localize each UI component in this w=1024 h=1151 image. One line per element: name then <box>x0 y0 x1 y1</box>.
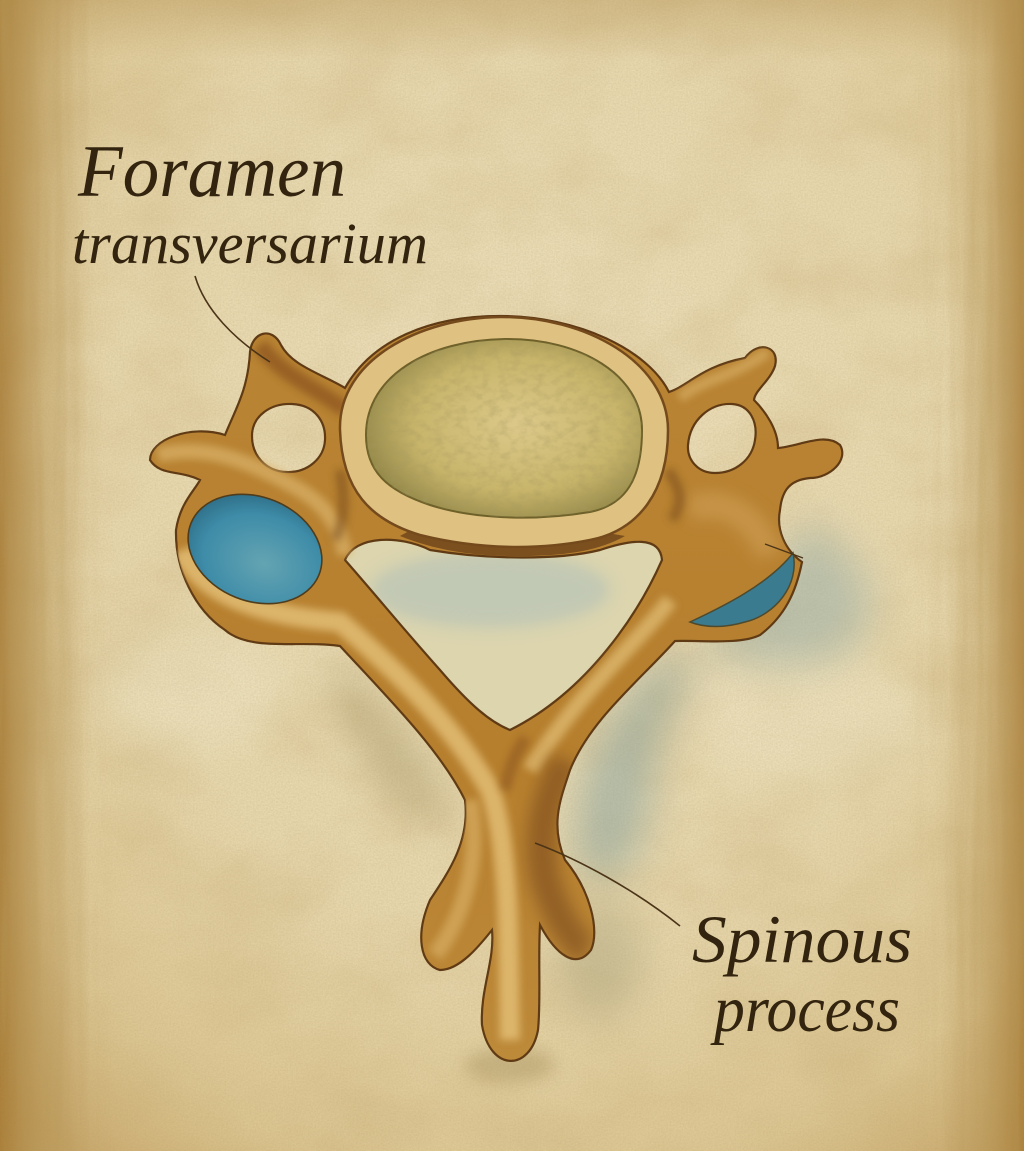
bone silhouette with holes <box>150 316 842 1061</box>
left articular facet <box>172 475 338 623</box>
body lower brown edge <box>400 525 625 556</box>
label: Spinous process: Spinous <box>692 901 912 977</box>
vertebra bone <box>150 316 842 1061</box>
body outer ring <box>340 317 668 547</box>
cast shadow <box>330 520 871 1083</box>
right articular facet <box>690 553 794 626</box>
label: Foramen transversarium: transversarium <box>72 211 428 276</box>
label: Spinous process: process <box>710 973 900 1046</box>
vertebral foramen wash <box>345 540 662 730</box>
leader line: Spinous process <box>535 843 680 926</box>
vertebral body <box>338 316 670 556</box>
label: Spinous process <box>692 901 912 1046</box>
bone shading <box>158 345 770 1040</box>
leader line: Foramen transversarium <box>195 276 270 362</box>
label: Foramen transversarium: Foramen <box>77 131 346 213</box>
leader line: right facet <box>765 544 803 558</box>
body inner surface <box>365 338 643 519</box>
label: Foramen transversarium <box>72 131 428 276</box>
